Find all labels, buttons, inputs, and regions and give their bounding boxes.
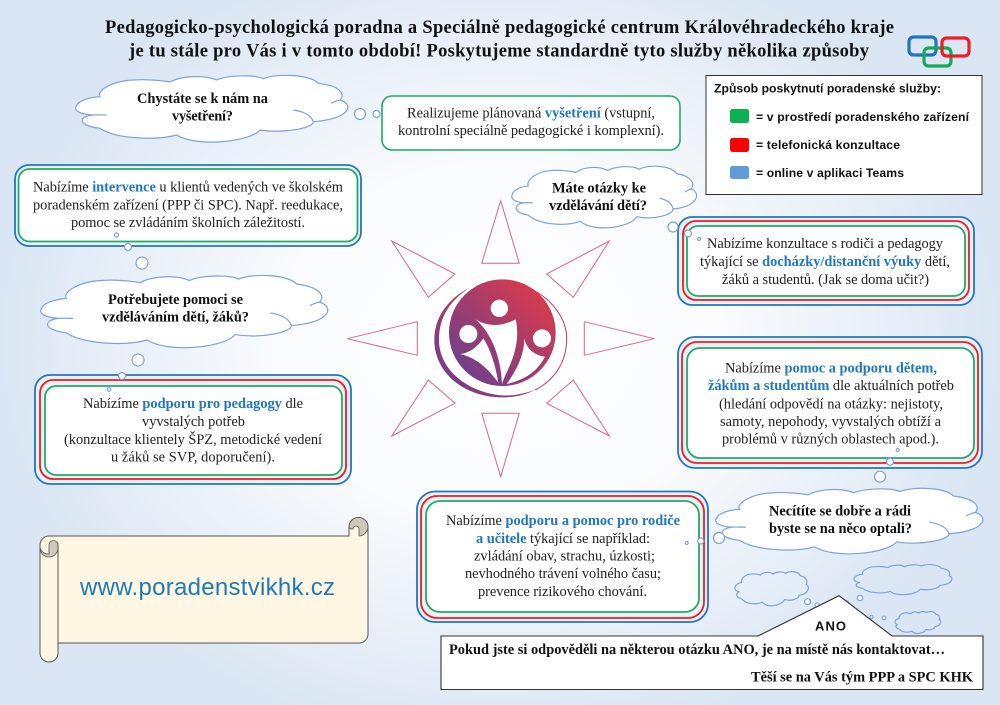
panel: legend: = v prostředí poradenského zařízení — [756, 110, 970, 124]
panel: pomoc a podpora dětem: (hledání odpovědí na otázky: nejistoty, — [719, 396, 943, 412]
cloud: Potřebujete pomoci: Potřebujete pomoci se — [108, 292, 244, 308]
cloud: Necítíte se dobře — [716, 488, 983, 554]
scroll banner with web address — [40, 518, 368, 662]
cloud: Necítíte se dobře: byste se na něco optali? — [769, 521, 912, 537]
panel: konzultace: žáků a studentů. (Jak se doma učit?) — [722, 272, 929, 288]
title: je tu stále pro Vás i v tomto období! Poskytujeme standardně tyto služby několika způsoby — [128, 42, 870, 62]
thought bubbles: on pedagogy panel — [107, 372, 126, 391]
callout: contact us: ANO — [815, 618, 846, 634]
panel: intervence: poradenském zařízení (PPP či SPC). Např. reedukace, — [33, 198, 343, 214]
panel: konzultace: Nabízíme konzultace s rodiči a pedagogy — [707, 236, 944, 252]
cloud: Necítíte se dobře: Necítíte se dobře a rádi — [769, 504, 911, 520]
callout: contact us — [441, 596, 983, 690]
panel: intervence: pomoc se zvládáním školních záležitostí. — [71, 215, 305, 231]
title: Pedagogicko-psychologická poradna a Speciálně pedagogické centrum Královéhradeckého kraje — [105, 18, 894, 38]
icon: linked rings — [909, 37, 969, 66]
panel: legend: = online v aplikaci Teams — [756, 166, 904, 180]
panel: podpora pro rodiče a učitele: nevhodného trávení volného času; — [465, 566, 661, 582]
small empty cloud lower — [895, 611, 941, 633]
panel: pomoc a podpora dětem: samoty, nepohody, vyvstalých obtíží a — [720, 414, 942, 430]
panel: pomoc a podpora dětem: problémů v různých oblastech apod.). — [722, 432, 939, 448]
panel: intervence: Nabízíme intervence u klientů vedených ve školském — [33, 180, 343, 196]
scroll banner with web address: www.poradenstvikhk.cz — [79, 574, 335, 601]
small empty cloud right — [854, 565, 952, 595]
callout: contact us: Pokud jste si odpověděli na některou otázku ANO, je na místě nás kontaktovat… — [449, 642, 945, 658]
panel: podpora pro rodiče a učitele: Nabízíme podporu a pomoc pro rodiče — [446, 513, 681, 529]
panel: podpora pro pedagogy: u žáků se SVP, doporučení). — [111, 450, 275, 466]
panel: podpora pro pedagogy: vyvstalých potřeb — [142, 414, 245, 430]
panel: podpora pro pedagogy — [35, 375, 351, 484]
thought bubbles: rodiče panel to cloud — [685, 532, 724, 544]
panel: podpora pro rodiče a učitele: prevence rizikového chování. — [478, 584, 647, 600]
star rays — [347, 201, 654, 477]
thought bubbles: konzultace — [668, 222, 700, 240]
thought bubbles: pomoc panel to cloud — [874, 448, 899, 482]
thought bubbles: small clouds — [805, 595, 886, 620]
thought bubbles: pomoc cloud to pedagogy panel — [132, 354, 144, 366]
panel: podpora pro rodiče a učitele: a učitele týkající se například: — [476, 531, 650, 547]
logo: central family emblem — [434, 279, 567, 397]
panel: pomoc a podpora dětem: žákům a studentům dle aktuálních potřeb — [708, 378, 954, 394]
panel: pomoc a podpora dětem: Nabízíme pomoc a podporu dětem, — [725, 360, 937, 376]
cloud: Máte otázky: vzdělávání dětí? — [549, 198, 647, 214]
panel: podpora pro pedagogy: (konzultace klientely ŠPZ, metodické vedení — [64, 431, 322, 448]
thought bubbles: first cloud — [354, 108, 390, 120]
callout: contact us: Těší se na Vás tým PPP a SPC KHK — [751, 670, 974, 686]
small empty cloud left — [735, 572, 808, 606]
cloud: Potřebujete pomoci: vzděláváním dětí, žáků? — [102, 310, 249, 326]
panel: podpora pro pedagogy: Nabízíme podporu pro pedagogy dle — [83, 396, 303, 412]
cloud: Máte otázky — [512, 166, 697, 228]
cloud: Chystáte se k nám na vyšetření — [76, 75, 348, 142]
panel: vyšetření — [382, 96, 680, 150]
cloud: Chystáte se k nám na vyšetření: Chystáte se k nám na — [137, 91, 268, 107]
panel: legend — [706, 76, 982, 194]
panel: podpora pro rodiče a učitele — [417, 492, 708, 622]
title — [105, 18, 894, 62]
panel: legend: = telefonická konzultace — [756, 138, 900, 152]
panel: vyšetření: Realizujeme plánovaná vyšetření (vstupní, — [407, 106, 655, 122]
panel: intervence — [15, 165, 361, 246]
panel: legend: Způsob poskytnutí poradenské služby: — [714, 82, 941, 96]
cloud: Máte otázky: Máte otázky ke — [552, 180, 647, 196]
panel: vyšetření: kontrolní speciálně pedagogické i komplexní). — [398, 123, 664, 139]
panel: konzultace: týkající se docházky/distanční výuky dětí, — [700, 254, 950, 270]
panel: podpora pro rodiče a učitele: zvládání obav, strachu, úzkosti; — [474, 548, 655, 564]
cloud: Potřebujete pomoci — [41, 275, 328, 348]
panel: konzultace — [678, 217, 974, 305]
cloud: Chystáte se k nám na vyšetření: vyšetření? — [172, 108, 233, 124]
panel: pomoc a podpora dětem — [678, 337, 982, 468]
thought bubbles: intervence to pomoc cloud — [114, 233, 148, 269]
